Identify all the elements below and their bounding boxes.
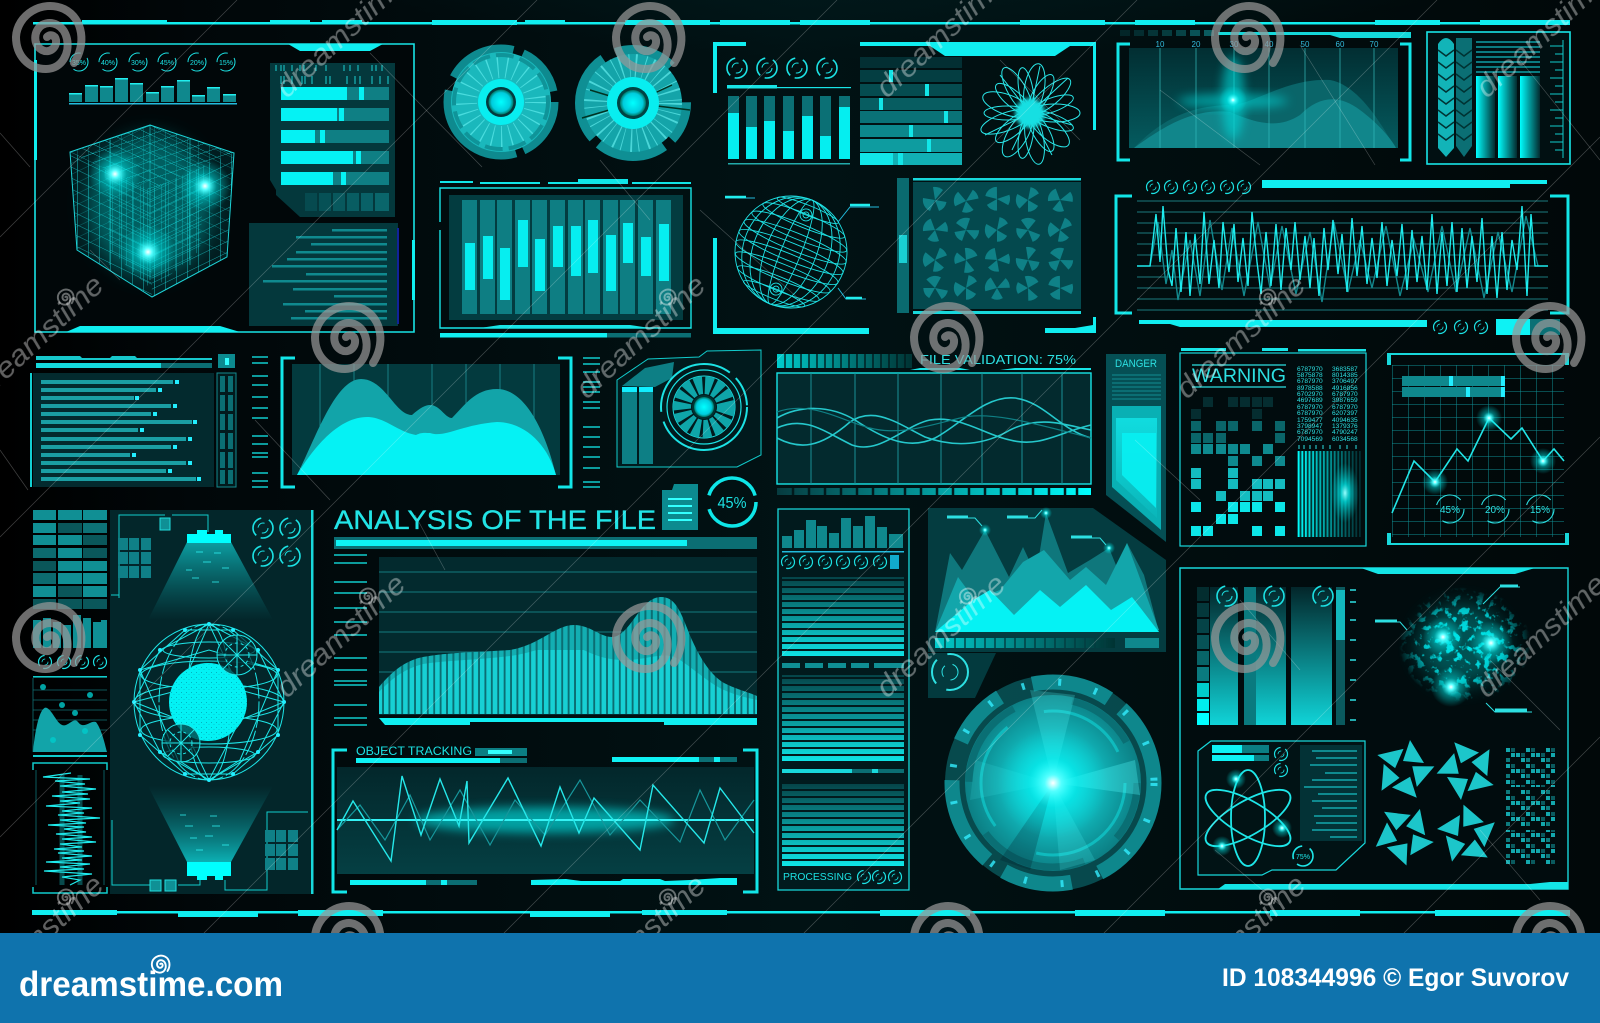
radar dial bbox=[945, 675, 1161, 891]
label: DANGER bbox=[1115, 358, 1157, 370]
chart background bbox=[379, 557, 757, 715]
progress bar bbox=[334, 537, 757, 549]
chevron column light bbox=[1438, 38, 1454, 157]
bright stripes bbox=[379, 650, 757, 715]
wireframe cube bbox=[70, 125, 234, 297]
gradient bars bbox=[1476, 76, 1540, 158]
panel: turbine module bbox=[617, 350, 761, 467]
text-line block bbox=[249, 223, 399, 326]
numbers: 8014385 bbox=[1332, 372, 1358, 379]
top cone dashes bbox=[186, 552, 229, 582]
back area bbox=[297, 379, 556, 475]
module top bbox=[622, 362, 674, 387]
bracket bbox=[1118, 44, 1410, 160]
columns bbox=[462, 200, 671, 314]
numbers: 8978588 bbox=[1297, 385, 1323, 392]
chart frame bbox=[777, 373, 1091, 484]
numbers: 4094635 bbox=[1332, 417, 1358, 424]
frame tabs bbox=[34, 44, 415, 332]
wireframe globe bbox=[718, 179, 864, 325]
numbers: 1759477 bbox=[1297, 417, 1323, 424]
atom ring 75%: 75% bbox=[1296, 854, 1310, 861]
pinwheels bbox=[1360, 726, 1513, 884]
bottom bar bbox=[379, 718, 757, 725]
status gauges bbox=[858, 870, 902, 884]
turbine bbox=[661, 364, 747, 450]
top strip bbox=[440, 179, 691, 184]
panel: list with bars bbox=[30, 354, 268, 487]
axis labels: 40 bbox=[1265, 40, 1274, 49]
mini area chart bbox=[33, 676, 107, 757]
gauges bbox=[253, 518, 300, 566]
footer band bbox=[0, 933, 1600, 1023]
bottom bar bbox=[1139, 320, 1427, 327]
bottom border bar bbox=[32, 910, 1570, 917]
numbers: 6702970 bbox=[1297, 391, 1323, 398]
axis labels: 70 bbox=[1370, 40, 1379, 49]
background bbox=[449, 195, 683, 320]
panel: bar and stacked dashboard bbox=[713, 42, 1096, 334]
progress right bbox=[612, 757, 737, 762]
vertical signal box bbox=[33, 763, 107, 893]
numbers: 3987659 bbox=[1332, 397, 1358, 404]
percent labels: 45% bbox=[160, 60, 174, 67]
hud dial right bbox=[580, 50, 690, 156]
striped glow box bbox=[1297, 451, 1361, 537]
grid bbox=[1392, 365, 1564, 537]
dim wave bbox=[337, 780, 754, 845]
main background bbox=[110, 510, 311, 894]
line bbox=[1392, 418, 1564, 513]
axis labels: 60 bbox=[1336, 40, 1345, 49]
separator two bbox=[782, 769, 904, 773]
progress ring 45% bbox=[708, 478, 756, 526]
nebula bbox=[1399, 587, 1531, 707]
panel: object tracking bbox=[333, 746, 757, 892]
mini bar chart bbox=[782, 516, 904, 552]
bracket frame bbox=[713, 42, 1096, 334]
inner level bright bbox=[1122, 433, 1156, 508]
vertical gridlines bbox=[1160, 48, 1374, 148]
brackets bbox=[1116, 196, 1568, 313]
bottom projector bbox=[187, 862, 231, 880]
numbers: 6787970 bbox=[1297, 410, 1323, 417]
percent labels: 20% bbox=[190, 60, 204, 67]
bar chart bbox=[69, 78, 237, 104]
axis labels: 50 bbox=[1301, 40, 1310, 49]
percent labels: 35% bbox=[72, 60, 86, 67]
side cells bbox=[217, 373, 236, 487]
percent labels: 15% bbox=[219, 60, 233, 67]
callouts bbox=[947, 510, 1106, 545]
header line bbox=[727, 85, 851, 88]
connector lines bbox=[111, 515, 308, 890]
atom module outline bbox=[1198, 741, 1365, 875]
list bars bbox=[41, 380, 196, 481]
bottom cone dashes bbox=[180, 815, 229, 850]
percent labels: 30% bbox=[131, 60, 145, 67]
file icon bbox=[662, 484, 698, 530]
baseline bbox=[728, 163, 850, 164]
connector nodes bbox=[150, 518, 176, 891]
glow band bbox=[337, 807, 754, 833]
header bars bbox=[36, 354, 235, 368]
chart background bbox=[337, 767, 754, 874]
tall columns bbox=[1197, 587, 1332, 725]
panel: noise waveform bbox=[1116, 180, 1568, 335]
glow marker bbox=[1178, 56, 1288, 140]
top segments bbox=[1181, 348, 1366, 352]
atom line list bbox=[1300, 745, 1362, 841]
hud dial left bbox=[448, 49, 554, 155]
list background bbox=[33, 373, 214, 487]
numbers: 4697689 bbox=[1297, 397, 1323, 404]
atom electrons bbox=[1212, 769, 1292, 856]
progress strip separators bbox=[785, 354, 905, 368]
nebula callouts bbox=[1375, 586, 1532, 712]
percent labels: 40% bbox=[101, 60, 115, 67]
heading: analysis of the file: ANALYSIS OF THE FILE bbox=[334, 505, 656, 535]
bar chart highlights bbox=[69, 78, 236, 96]
chart background bbox=[292, 364, 560, 475]
chevron column dark bbox=[1456, 38, 1472, 157]
bracket bbox=[333, 750, 757, 892]
scale ticks bbox=[1550, 40, 1563, 158]
progress ring 45%: 45% bbox=[718, 495, 746, 512]
bottom bar bbox=[440, 325, 691, 338]
numbers: 6787970 bbox=[1297, 378, 1323, 385]
barcode bbox=[1299, 445, 1356, 449]
numbers: 6034568 bbox=[1332, 436, 1358, 443]
top bar bbox=[777, 368, 1091, 370]
bottom key pad bbox=[265, 830, 298, 870]
dreamstime watermark text: dreamstime bbox=[569, 268, 712, 405]
axis labels: 30 bbox=[1230, 40, 1239, 49]
atom ring 75% bbox=[1293, 846, 1313, 866]
numbers: 6207397 bbox=[1332, 410, 1358, 417]
panel: grid line chart bbox=[1387, 353, 1569, 545]
front wave bbox=[1134, 99, 1396, 148]
stripe block two bbox=[782, 675, 904, 763]
inner level mid bbox=[1116, 418, 1157, 518]
label: FILE VALIDATION: 75% bbox=[920, 352, 1076, 367]
panel frame bbox=[35, 44, 414, 332]
chevron separators bbox=[1438, 50, 1472, 140]
sine curves bbox=[777, 398, 1091, 447]
back wave bbox=[1134, 80, 1395, 148]
dreamstime watermark text: dreamstime bbox=[1169, 268, 1312, 405]
waveform bright bbox=[1137, 206, 1548, 298]
numbers: 3706497 bbox=[1332, 378, 1358, 385]
label: OBJECT TRACKING bbox=[356, 746, 472, 758]
stripes bbox=[1112, 375, 1161, 399]
axis labels: 10 bbox=[1156, 40, 1165, 49]
top bar bbox=[1262, 180, 1547, 188]
module columns bbox=[622, 387, 653, 464]
mid peaks bbox=[935, 543, 1159, 632]
panel: file validation bbox=[777, 352, 1091, 495]
gauge labels: 45% bbox=[1440, 505, 1460, 516]
striped foreground bbox=[379, 590, 757, 715]
spirograph bbox=[978, 62, 1080, 166]
list end markers bbox=[132, 380, 201, 481]
frame bbox=[440, 188, 691, 328]
back peaks bbox=[935, 513, 1159, 632]
flower pattern panel bbox=[897, 178, 1081, 314]
pixel blocks bbox=[1506, 748, 1556, 864]
numbers: 3683587 bbox=[1332, 366, 1358, 373]
stripes bbox=[1476, 41, 1540, 73]
network sphere bbox=[134, 624, 284, 780]
outline bbox=[617, 350, 761, 467]
footer logo: dreamstime.com bbox=[19, 965, 283, 1004]
bottom status block bbox=[1496, 319, 1560, 335]
pixel matrix bbox=[1191, 397, 1285, 536]
header blocks bbox=[1402, 376, 1505, 397]
tile grid bbox=[33, 510, 107, 609]
stripe block three bbox=[782, 784, 904, 866]
dreamstime watermark text: dreamstime bbox=[1169, 868, 1312, 1005]
frame rails bbox=[1387, 353, 1569, 545]
panel: network sphere bbox=[33, 510, 314, 894]
panel: candlestick chart bbox=[440, 179, 691, 338]
vertical bars bbox=[728, 96, 850, 159]
panel: reactor and atom bbox=[1180, 568, 1568, 889]
glow points bbox=[1422, 405, 1556, 495]
footer credit: ID 108344996 © Egor Suvorov bbox=[1222, 964, 1569, 992]
small gauges bbox=[1146, 180, 1250, 194]
sphere nodes bbox=[132, 622, 286, 782]
grid lines bbox=[1137, 201, 1548, 310]
bottom gauges bbox=[1434, 320, 1488, 334]
right edge bbox=[311, 510, 314, 894]
numbers: 6787970 bbox=[1297, 404, 1323, 411]
inner ball bbox=[169, 663, 247, 741]
bright wave bbox=[337, 776, 754, 861]
candles bbox=[465, 220, 669, 300]
panel: warning bbox=[1180, 348, 1366, 546]
label: PROCESSING bbox=[783, 871, 852, 883]
left edge bbox=[30, 373, 32, 487]
atom gauges bbox=[1274, 748, 1288, 776]
panel: file analysis chart bbox=[334, 537, 757, 725]
atom module bars bbox=[1212, 745, 1269, 761]
panel: chevron gauge bbox=[1427, 32, 1570, 164]
small wheels bbox=[162, 635, 257, 762]
percent gauges bbox=[70, 53, 235, 71]
panel: danger bbox=[1106, 354, 1166, 542]
corner ring module bbox=[928, 653, 996, 698]
numbers: 7094569 bbox=[1297, 436, 1323, 443]
numbers: 1379376 bbox=[1332, 423, 1358, 430]
numbers bbox=[1297, 366, 1358, 443]
frame bbox=[1180, 353, 1366, 546]
panel: mountain glow chart bbox=[1118, 30, 1411, 160]
progress left bbox=[356, 758, 527, 763]
globe callouts bbox=[725, 197, 879, 299]
mini bars bbox=[33, 615, 107, 648]
top bar bbox=[1218, 32, 1411, 38]
numbers: 6787970 bbox=[1297, 366, 1323, 373]
chart background bbox=[1129, 48, 1398, 148]
top border bar bbox=[33, 20, 1570, 25]
stacked rows bbox=[860, 57, 962, 165]
gauge labels: 15% bbox=[1530, 505, 1550, 516]
numbers: 6787970 bbox=[1297, 429, 1323, 436]
lower bars bbox=[350, 878, 737, 885]
column gauges bbox=[1217, 586, 1333, 606]
small gauges bbox=[727, 58, 837, 78]
gauges bbox=[1436, 495, 1554, 523]
atom bbox=[1198, 770, 1298, 866]
numbers: 4916856 bbox=[1332, 385, 1358, 392]
vertical bar values bbox=[728, 107, 850, 159]
tick column bbox=[252, 357, 268, 487]
numbers: 6787970 bbox=[1332, 404, 1358, 411]
gauge labels bbox=[1440, 505, 1550, 516]
horizontal progress bars bbox=[270, 63, 395, 217]
back area bbox=[379, 597, 757, 714]
progress strip bbox=[777, 354, 912, 368]
front peaks bbox=[935, 585, 1159, 632]
frame bbox=[1427, 32, 1570, 164]
frame bbox=[1180, 568, 1568, 889]
small watermark spirals bbox=[58, 290, 1276, 905]
panel: layered area chart bbox=[282, 358, 600, 487]
right ticks bbox=[583, 358, 600, 487]
gridlines bbox=[320, 364, 534, 475]
waveform dim bbox=[1150, 216, 1538, 302]
heading: WARNING bbox=[1192, 366, 1286, 387]
numbers: 3798947 bbox=[1297, 423, 1323, 430]
dreamstime watermark text: dreamstime bbox=[869, 567, 1012, 704]
frame tabs bbox=[1218, 568, 1568, 889]
dreamstime watermark text: dreamstime bbox=[269, 567, 412, 704]
stripe block one bbox=[782, 577, 904, 658]
level strip separators bbox=[793, 488, 1077, 495]
panel: triangle peaks bbox=[928, 507, 1166, 652]
level strip bbox=[935, 638, 1115, 648]
mini gauges bbox=[38, 656, 106, 668]
axis labels: 20 bbox=[1192, 40, 1201, 49]
numbers: 5875878 bbox=[1297, 372, 1323, 379]
frame bbox=[778, 509, 909, 890]
top light cone bbox=[148, 542, 273, 620]
numbers: 6787970 bbox=[1332, 391, 1358, 398]
heading rules bbox=[1192, 365, 1286, 387]
panel: cube and bars bbox=[34, 44, 415, 332]
side gauge bbox=[1336, 587, 1356, 725]
level chip bbox=[1125, 638, 1159, 648]
bottom light cone bbox=[148, 786, 273, 862]
top fading strip bbox=[1120, 30, 1214, 36]
inner level bbox=[1112, 406, 1161, 530]
front area bbox=[297, 417, 556, 475]
bracket bbox=[282, 358, 571, 487]
axis labels bbox=[1156, 40, 1379, 49]
dreamstime watermark text: dreamstime bbox=[569, 868, 712, 1005]
gridlines bbox=[811, 373, 1062, 484]
top projector bbox=[187, 530, 231, 543]
gauges bbox=[782, 555, 899, 569]
shield bbox=[1106, 354, 1166, 542]
percent labels bbox=[72, 60, 233, 67]
background bbox=[928, 508, 1166, 652]
status chip bbox=[475, 748, 527, 756]
level strip separators bbox=[945, 638, 1105, 648]
separator one bbox=[782, 663, 904, 668]
panel: processing bbox=[778, 509, 909, 890]
top key pad bbox=[118, 538, 151, 578]
peak markers bbox=[979, 507, 1115, 554]
left ticks bbox=[334, 555, 367, 725]
gauge labels: 20% bbox=[1485, 505, 1505, 516]
level strip bbox=[777, 488, 1091, 495]
numbers: 4790247 bbox=[1332, 429, 1358, 436]
gridlines bbox=[379, 572, 757, 672]
